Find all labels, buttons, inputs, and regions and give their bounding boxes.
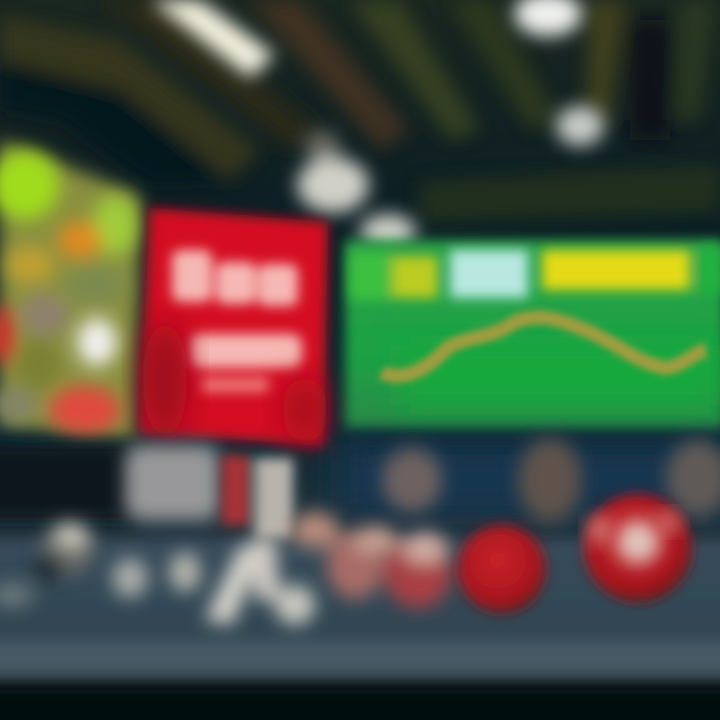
back row of grey figures	[125, 438, 720, 522]
pale pink balls	[291, 512, 452, 608]
red and white ball	[584, 494, 692, 602]
panel: colourful left board	[0, 140, 140, 440]
red ball	[458, 525, 546, 613]
white figures on table	[0, 522, 315, 625]
panel: green line chart board	[345, 240, 720, 428]
panel: red sale board	[140, 208, 328, 446]
table	[0, 445, 720, 720]
board highlights	[172, 250, 302, 392]
chart lower shade	[400, 345, 720, 405]
ceiling lights	[150, 0, 604, 250]
stand under red board	[222, 455, 293, 538]
ceiling beams	[0, 0, 720, 222]
chart header band	[350, 246, 720, 300]
line chart	[382, 317, 706, 376]
